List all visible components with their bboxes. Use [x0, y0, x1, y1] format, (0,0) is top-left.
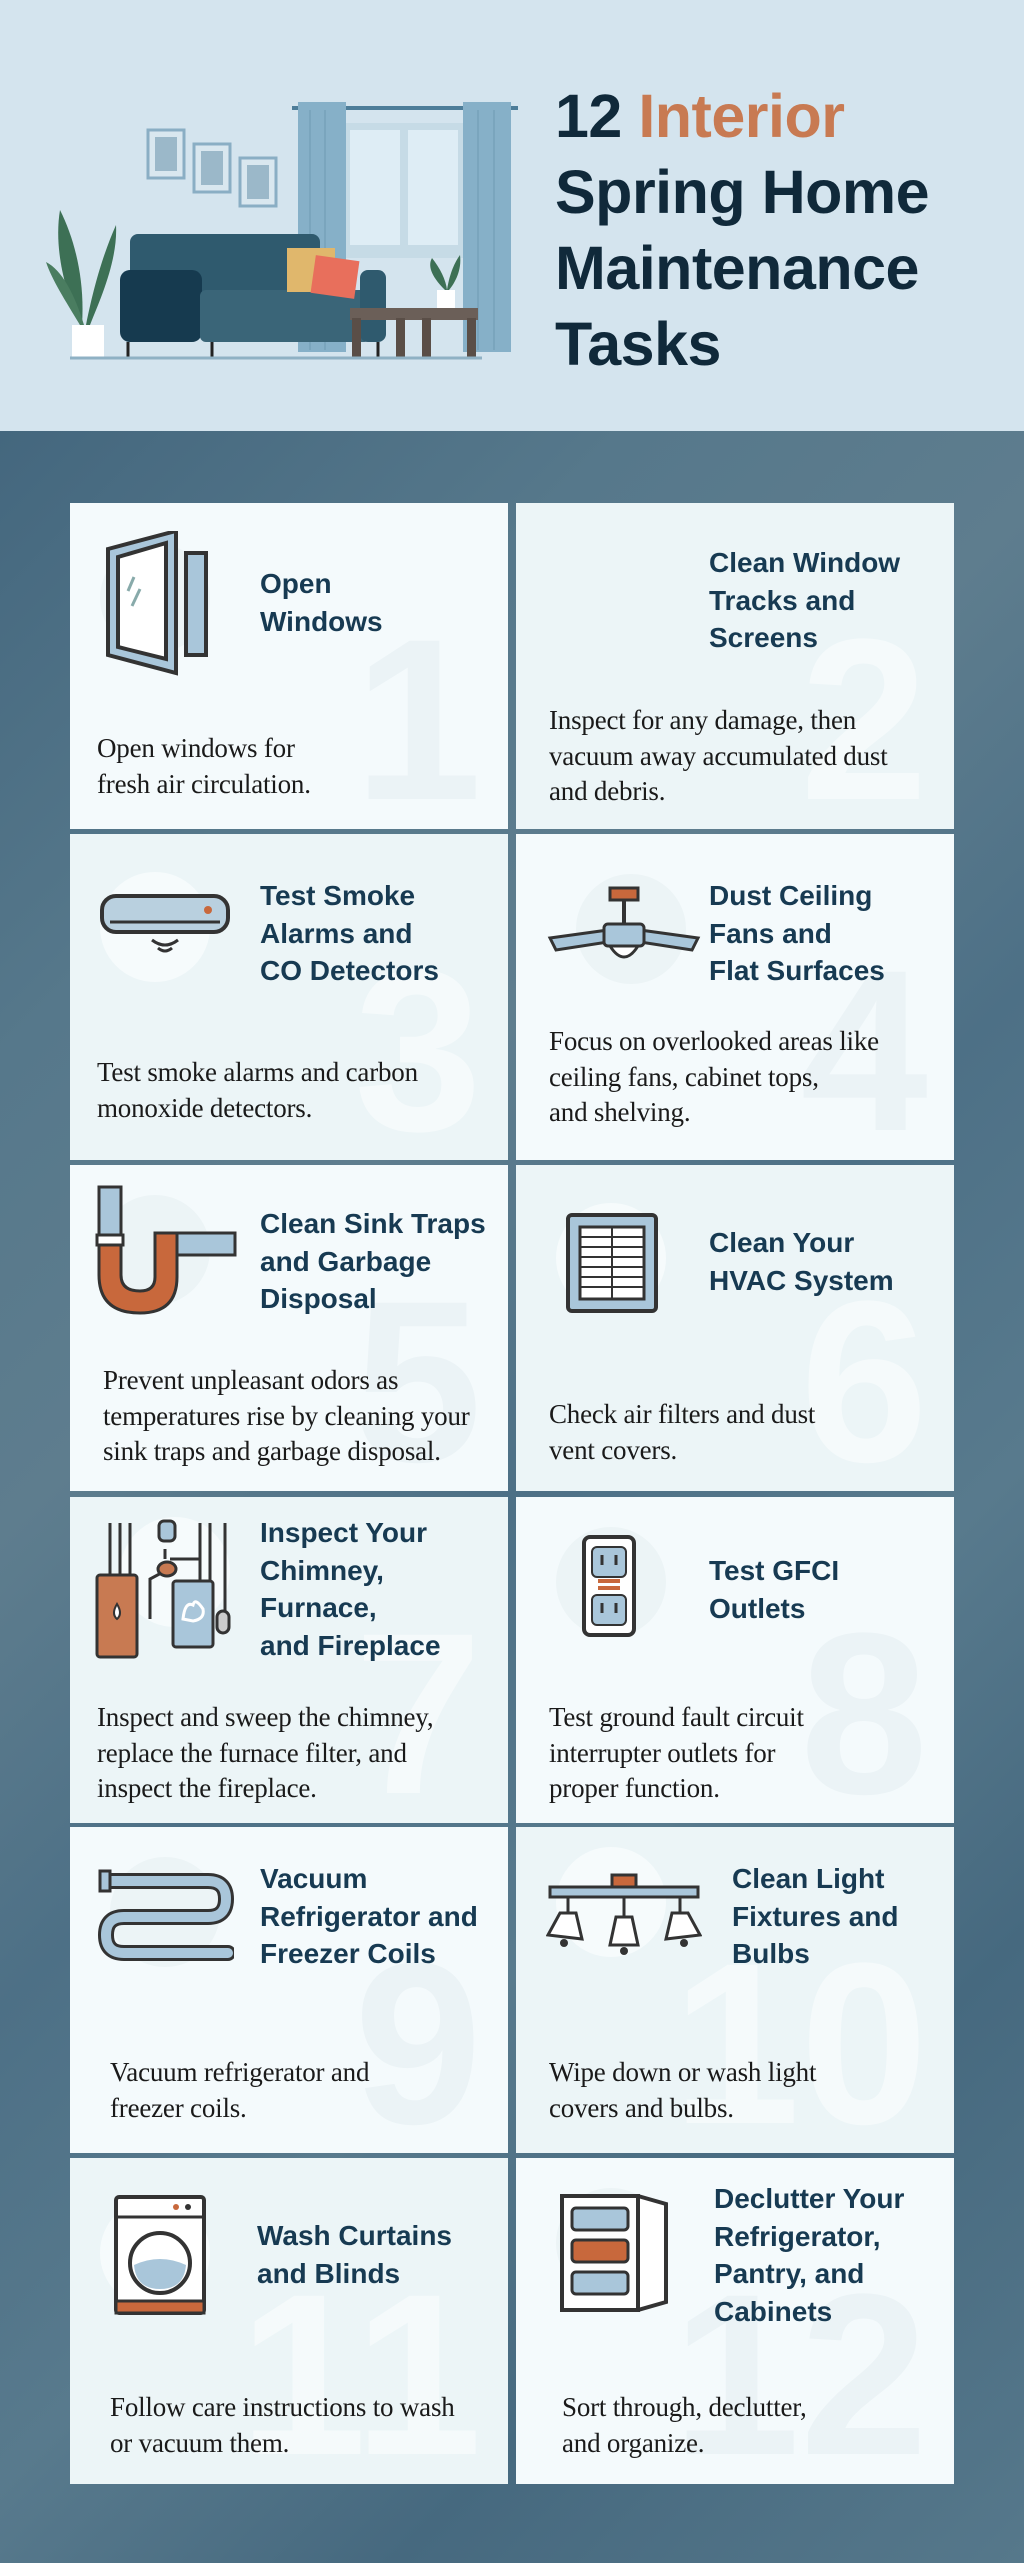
card 5: sink traps: Prevent unpleasant odors as: [103, 1365, 398, 1395]
card 6: HVAC: vent covers.: [549, 1434, 677, 1464]
card 11: curtains: Wash Curtains: [257, 2220, 452, 2251]
card 2: window tracks: [516, 503, 954, 829]
card 6: HVAC: Check air filters and dust: [549, 1399, 815, 1429]
card 12: declutter: Cabinets: [714, 2296, 832, 2326]
card 2: window tracks: vacuum away accumulated dust: [549, 740, 888, 770]
card 10: light fixtures: Bulbs: [732, 1938, 810, 1969]
card 4: ceiling fans: ceiling fans, cabinet tops,: [549, 1062, 819, 1092]
card 9: refrigerator coils: Vacuum: [260, 1863, 367, 1894]
card 8: GFCI: [516, 1497, 954, 1823]
card 11: curtains: or vacuum them.: [110, 2428, 289, 2458]
card 1: open windows: [70, 503, 508, 829]
title: Spring Home: [555, 158, 929, 226]
card 10: light fixtures: Clean Light: [732, 1863, 884, 1894]
card 8: GFCI: Outlets: [709, 1592, 805, 1624]
card 5: sink traps: temperatures rise by cleaning your: [103, 1400, 470, 1430]
card 4: ceiling fans: Fans and: [709, 918, 832, 948]
card 3: smoke alarms: Test smoke alarms and carbon: [97, 1057, 418, 1087]
icon: outlet: [582, 1535, 636, 1637]
title: 12 Interior: [555, 82, 844, 150]
card 10: light fixtures: Wipe down or wash light: [549, 2057, 816, 2087]
card 11: curtains: [70, 2158, 508, 2484]
title: [555, 82, 929, 378]
title: Tasks: [555, 310, 721, 378]
heading: [260, 568, 383, 636]
card 8: GFCI: Test ground fault circuit: [549, 1702, 804, 1732]
card 7: chimney furnace: [70, 1497, 508, 1823]
card 3: smoke alarms: CO Detectors: [260, 955, 439, 986]
illustration: living room: [46, 102, 518, 360]
card 8: GFCI: proper function.: [549, 1773, 720, 1803]
title: Maintenance: [555, 234, 919, 302]
card 8: GFCI: Test GFCI: [709, 1555, 839, 1586]
plant left: [46, 210, 116, 357]
icon: smoke alarm: [100, 894, 230, 952]
card 8: GFCI: interrupter outlets for: [549, 1738, 775, 1768]
card 4: ceiling fans: and shelving.: [549, 1097, 690, 1127]
icon: sink trap: [96, 1186, 236, 1314]
body text: fresh air circulation.: [97, 768, 311, 798]
window: [345, 123, 463, 258]
card 12: declutter: Refrigerator,: [714, 2220, 880, 2252]
icon: coils: [98, 1870, 234, 1961]
card 6: HVAC: HVAC System: [709, 1264, 894, 1296]
card 9: refrigerator coils: freezer coils.: [110, 2092, 247, 2122]
card 3: smoke alarms: monoxide detectors.: [97, 1092, 312, 1122]
card 7: chimney furnace: replace the furnace filter, and: [97, 1738, 407, 1768]
card 5: sink traps: and Garbage: [260, 1246, 431, 1276]
card 7: chimney furnace: Inspect and sweep the chimney,: [97, 1702, 433, 1732]
card 12: declutter: Sort through, declutter,: [562, 2392, 807, 2422]
side table and small plant: [350, 255, 478, 358]
card 5: sink traps: Clean Sink Traps: [260, 1208, 486, 1239]
card 7: chimney furnace: Chimney,: [260, 1554, 384, 1586]
card 2: window tracks: Screens: [709, 622, 818, 653]
card 7: chimney furnace: and Fireplace: [260, 1630, 441, 1660]
card 4: ceiling fans: [516, 834, 954, 1160]
card 7: chimney furnace: inspect the fireplace.: [97, 1773, 317, 1803]
icon: light fixture: [546, 1874, 702, 1955]
card 10: light fixtures: covers and bulbs.: [549, 2092, 734, 2122]
card 9: refrigerator coils: Refrigerator and: [260, 1900, 478, 1932]
picture frames: [148, 130, 276, 206]
curtains: [292, 102, 518, 352]
icon: window: [106, 531, 208, 676]
header band: [0, 0, 1024, 431]
heading: Open: [260, 568, 332, 599]
icon: vent: [566, 1213, 658, 1313]
card 6: HVAC: Clean Your: [709, 1227, 854, 1258]
body text: Open windows for: [97, 733, 295, 763]
card 4: ceiling fans: Focus on overlooked areas like: [549, 1026, 879, 1056]
card 4: ceiling fans: Dust Ceiling: [709, 880, 872, 911]
card 9: refrigerator coils: Freezer Coils: [260, 1938, 436, 1969]
card 2: window tracks: Inspect for any damage, then: [549, 705, 856, 735]
card 2: window tracks: and debris.: [549, 776, 665, 806]
sofa: [120, 234, 386, 358]
card 7: chimney furnace: Inspect Your: [260, 1517, 427, 1548]
card 3: smoke alarms: Test Smoke: [260, 880, 415, 911]
card 12: declutter: Declutter Your: [714, 2183, 904, 2214]
card 12: declutter: Pantry, and: [714, 2258, 864, 2289]
card 6: HVAC: [516, 1165, 954, 1491]
icon: cabinet: [560, 2194, 668, 2312]
card 4: ceiling fans: Flat Surfaces: [709, 955, 885, 986]
card 9: refrigerator coils: [70, 1827, 508, 2153]
card 5: sink traps: Disposal: [260, 1283, 377, 1314]
card 7: chimney furnace: Furnace,: [260, 1592, 377, 1623]
body text: [97, 733, 311, 798]
card 10: light fixtures: Fixtures and: [732, 1900, 898, 1932]
icon: washer: [114, 2195, 206, 2315]
card 5: sink traps: sink traps and garbage disposal.: [103, 1436, 441, 1466]
card 12: declutter: and organize.: [562, 2428, 704, 2458]
icon: ceiling fan: [548, 886, 700, 958]
card 10: light fixtures: [516, 1827, 954, 2153]
card 9: refrigerator coils: Vacuum refrigerator and: [110, 2057, 369, 2087]
card 3: smoke alarms: [70, 834, 508, 1160]
card 3: smoke alarms: Alarms and: [260, 918, 412, 948]
icon: furnace: [96, 1520, 230, 1658]
card 11: curtains: and Blinds: [257, 2258, 400, 2288]
card 2: window tracks: Clean Window: [709, 547, 900, 578]
card 11: curtains: Follow care instructions to wash: [110, 2392, 455, 2422]
card 5: sink traps: [70, 1165, 508, 1491]
card 12: declutter: [516, 2158, 954, 2484]
heading: Windows: [260, 606, 383, 636]
card 2: window tracks: Tracks and: [709, 584, 855, 616]
